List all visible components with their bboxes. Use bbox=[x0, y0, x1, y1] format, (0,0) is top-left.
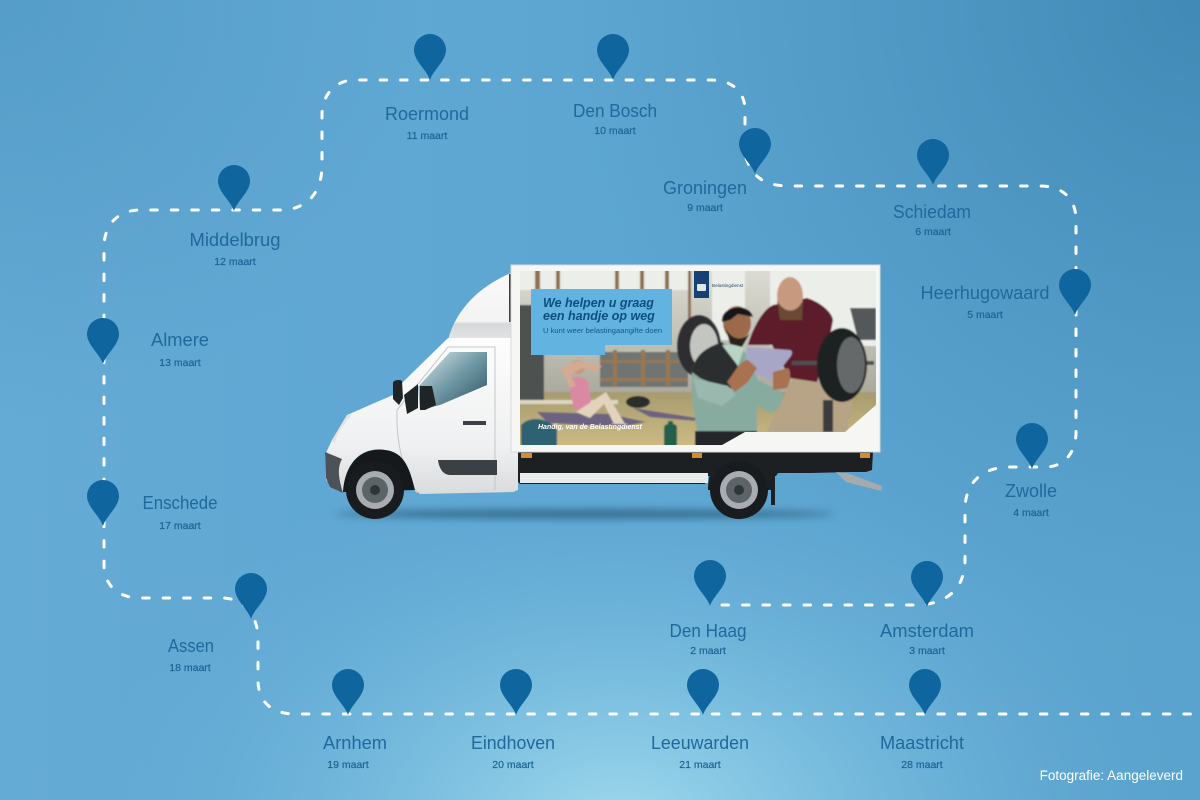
stop: Middelbrug: 12 maart bbox=[214, 256, 256, 268]
stop: Maastricht bbox=[880, 669, 964, 771]
stop: Enschede: 17 maart bbox=[159, 520, 201, 532]
stop: Roermond: Roermond bbox=[385, 103, 469, 124]
stop: Assen: 18 maart bbox=[169, 662, 211, 674]
cargo box bbox=[511, 265, 880, 452]
stop: Almere: 13 maart bbox=[159, 357, 201, 369]
Rijksoverheid logo bbox=[694, 271, 744, 298]
side skirt bbox=[520, 473, 708, 483]
stop: Den Bosch: Den Bosch bbox=[573, 100, 657, 121]
barbell bbox=[792, 328, 874, 432]
window bbox=[418, 352, 487, 410]
stop: Maastricht: Maastricht bbox=[880, 732, 964, 753]
stop: Leeuwarden: Leeuwarden bbox=[651, 732, 749, 753]
stop: Zwolle: 4 maart bbox=[1013, 507, 1049, 519]
dashed route line bbox=[104, 80, 1200, 714]
panel headline: een handje op weg bbox=[543, 309, 655, 323]
stop: Eindhoven: 20 maart bbox=[492, 759, 534, 771]
stop: Amsterdam bbox=[880, 561, 974, 657]
stop: Arnhem: 19 maart bbox=[327, 759, 369, 771]
marker lamps bbox=[521, 453, 870, 458]
rear wheel bbox=[708, 458, 775, 519]
hands bbox=[727, 360, 790, 392]
stop: Enschede: Enschede bbox=[142, 492, 218, 513]
stop: Zwolle bbox=[1005, 423, 1057, 519]
stop: Arnhem: Arnhem bbox=[323, 732, 387, 753]
stop: Amsterdam: Amsterdam bbox=[880, 620, 974, 641]
stop: Den Haag: 2 maart bbox=[690, 645, 726, 657]
stop: Zwolle: Zwolle bbox=[1005, 480, 1057, 501]
stop: Roermond bbox=[385, 34, 469, 142]
stop: Assen bbox=[168, 573, 267, 674]
stop: Groningen: 9 maart bbox=[687, 202, 723, 214]
tablet bbox=[745, 347, 792, 380]
stop: Eindhoven: Eindhoven bbox=[471, 732, 555, 753]
stop: Heerhugowaard: 5 maart bbox=[967, 309, 1003, 321]
stop: Leeuwarden bbox=[651, 669, 749, 771]
stop: Den Haag bbox=[670, 560, 746, 657]
rear bumper step bbox=[836, 472, 882, 491]
front wheel bbox=[343, 450, 415, 519]
stop: Den Haag: Den Haag bbox=[670, 620, 746, 641]
stop: Almere: Almere bbox=[151, 329, 209, 350]
panel subline: U kunt weer belastingaangifte doen bbox=[543, 326, 662, 335]
woman doing sit-ups bbox=[561, 360, 625, 424]
water bottle bbox=[664, 421, 677, 447]
campaign slogan on photo: Handig, van de Belastingdienst bbox=[538, 424, 643, 431]
left dark rack bbox=[518, 305, 544, 400]
duffel bag bbox=[521, 419, 557, 447]
exercise mats bbox=[537, 408, 697, 427]
stop: Heerhugowaard bbox=[920, 269, 1091, 321]
stop: Schiedam: Schiedam bbox=[893, 201, 971, 222]
stop: Assen: Assen bbox=[168, 635, 214, 656]
bumper bbox=[325, 452, 343, 493]
stop: Schiedam bbox=[893, 139, 971, 238]
logo wordmark: Belastingdienst bbox=[712, 283, 744, 288]
door handle and trim bbox=[438, 421, 497, 475]
chassis bbox=[516, 452, 873, 484]
stop: Den Bosch: 10 maart bbox=[594, 125, 636, 137]
kettlebell bbox=[626, 396, 650, 408]
rear mudflap strut bbox=[771, 475, 775, 505]
stop: Den Bosch bbox=[573, 34, 657, 137]
panel headline: We helpen u graag bbox=[543, 296, 654, 310]
truck bbox=[325, 265, 882, 519]
headlamp bbox=[332, 414, 352, 444]
cab body bbox=[325, 338, 518, 494]
stop: Arnhem bbox=[323, 669, 387, 771]
stop: Maastricht: 28 maart bbox=[901, 759, 943, 771]
stop: Eindhoven bbox=[471, 669, 555, 771]
stop: Almere bbox=[87, 318, 209, 369]
dumbbell rack bbox=[600, 352, 688, 387]
photo credit: Fotografie: Aangeleverd bbox=[1040, 768, 1183, 783]
stop: Groningen bbox=[663, 128, 771, 214]
cab roof fairing bbox=[448, 273, 514, 340]
fairing gap bbox=[509, 274, 511, 322]
stop: Enschede bbox=[87, 480, 218, 532]
stop: Middelbrug: Middelbrug bbox=[190, 229, 280, 250]
advert photo bbox=[518, 269, 878, 447]
wing mirror bbox=[393, 380, 436, 414]
exercise machine bbox=[850, 308, 876, 340]
blue slogan panel bbox=[531, 289, 672, 355]
seated man bbox=[692, 306, 783, 447]
stop: Schiedam: 6 maart bbox=[915, 226, 951, 238]
stop: Heerhugowaard: Heerhugowaard bbox=[920, 282, 1050, 303]
stop: Middelbrug bbox=[190, 165, 280, 268]
left barbell plate bbox=[677, 315, 721, 377]
cab door outline bbox=[397, 347, 495, 493]
gym windows bbox=[518, 269, 878, 346]
stop: Roermond: 11 maart bbox=[407, 130, 447, 142]
stop: Amsterdam: 3 maart bbox=[909, 645, 945, 657]
stop: Groningen: Groningen bbox=[663, 177, 747, 198]
stop: Leeuwarden: 21 maart bbox=[679, 759, 721, 771]
truck shadow bbox=[335, 509, 835, 519]
standing man bbox=[748, 277, 853, 432]
